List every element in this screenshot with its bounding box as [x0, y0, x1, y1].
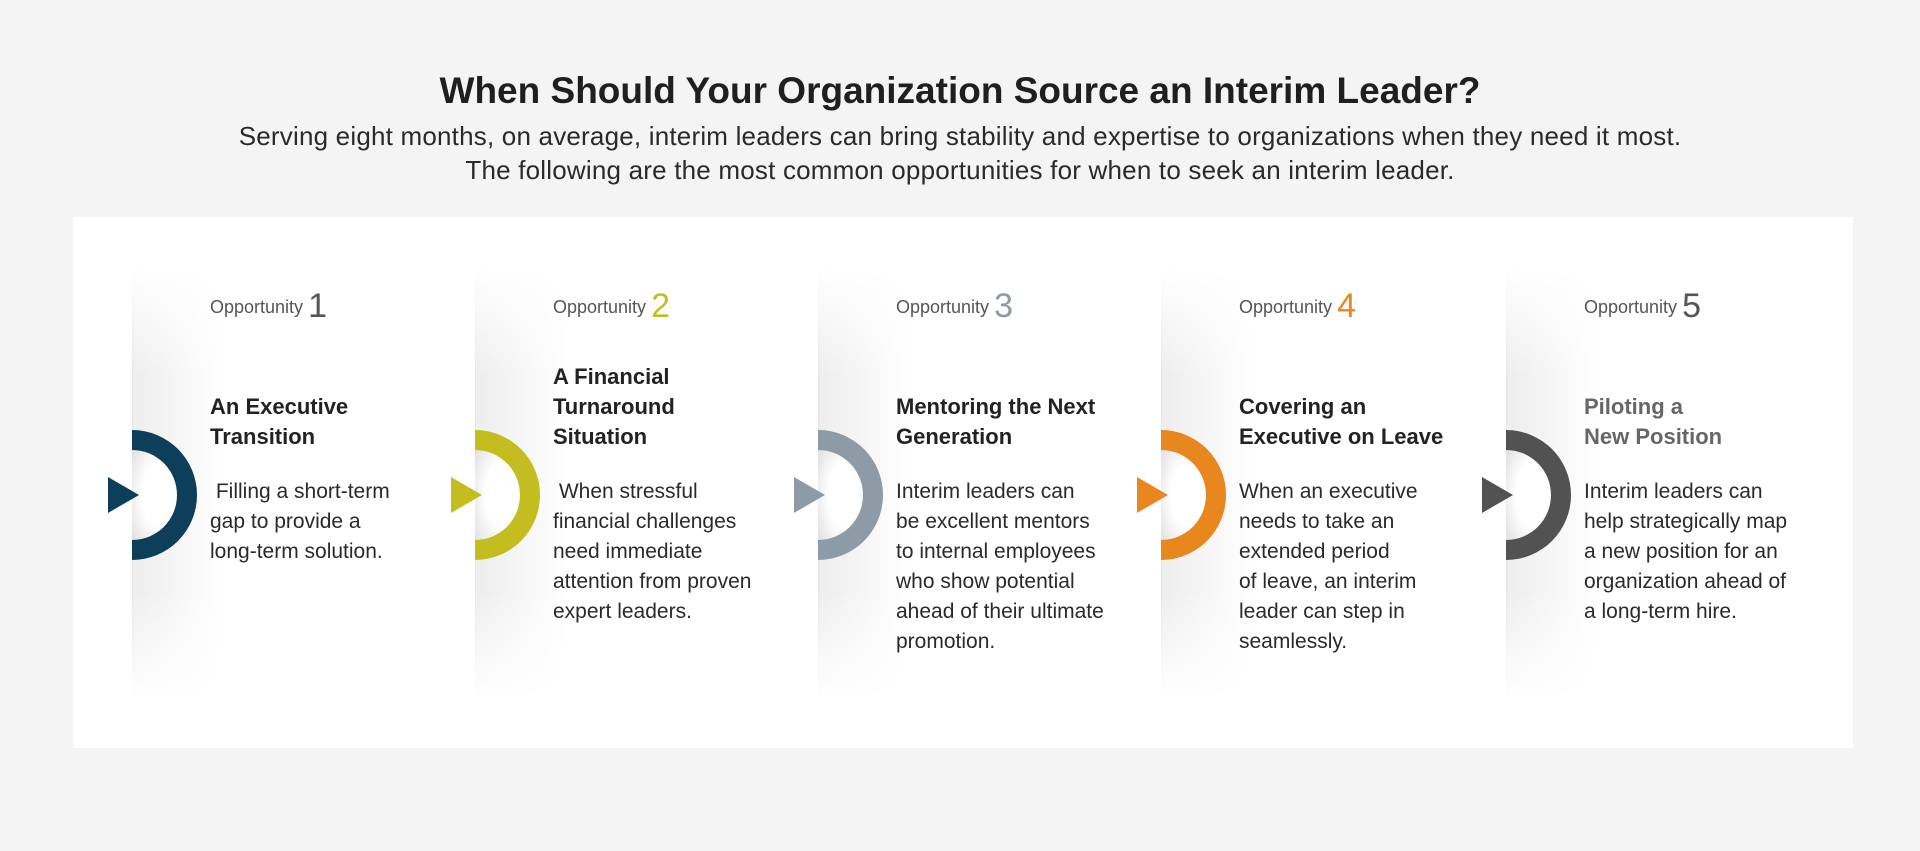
- card: opportunity 5: organization ahead of: [1584, 570, 1786, 593]
- card: opportunity 3: Mentoring the Next: [896, 394, 1095, 419]
- card: opportunity 1: Filling a short-term: [216, 480, 390, 503]
- card: opportunity 5: Opportunity5: [1584, 287, 1701, 325]
- card: opportunity 4: Executive on Leave: [1239, 424, 1443, 449]
- card: opportunity 3: be excellent mentors: [896, 510, 1090, 533]
- card: opportunity 2: Situation: [553, 424, 647, 449]
- card: opportunity 5: New Position: [1584, 424, 1722, 449]
- card: opportunity 4: needs to take an: [1239, 510, 1394, 533]
- card: opportunity 1: Transition: [210, 424, 315, 449]
- panel: opportunities: [73, 217, 1853, 748]
- card: opportunity 1: [108, 287, 390, 664]
- card: opportunity 1: gap to provide a: [210, 510, 361, 533]
- card: opportunity 3: Interim leaders can: [896, 480, 1075, 503]
- card: opportunity 3: [794, 287, 1104, 664]
- card: opportunity 3: to internal employees: [896, 540, 1096, 563]
- subtitle: The following are the most common opportunities for when to seek an interim leader.: [465, 155, 1455, 185]
- icon: ring arrow 1: [108, 430, 197, 560]
- icon: ring arrow 4: [1137, 430, 1226, 560]
- card: opportunity 3: who show potential: [896, 570, 1075, 593]
- card: opportunity 4: Covering an: [1239, 394, 1366, 419]
- card: opportunity 5: [1482, 287, 1787, 664]
- icon: ring arrow 2: [451, 430, 540, 560]
- title: When Should Your Organization Source an Interim Leader?: [440, 70, 1480, 111]
- card: opportunity 4: extended period: [1239, 540, 1390, 563]
- card: opportunity 2: need immediate: [553, 540, 702, 563]
- card: opportunity 5: Piloting a: [1584, 394, 1683, 419]
- card: opportunity 1: An Executive: [210, 394, 348, 419]
- card: opportunity 1: Opportunity1: [210, 287, 327, 325]
- card: opportunity 5: a new position for an: [1584, 540, 1778, 563]
- subtitle: [239, 121, 1681, 185]
- icon: ring arrow 3: [794, 430, 883, 560]
- card: opportunity 4: seamlessly.: [1239, 630, 1347, 653]
- card: opportunity 2: A Financial: [553, 364, 670, 389]
- card: opportunity 2: Turnaround: [553, 394, 675, 419]
- card: opportunity 3: Generation: [896, 424, 1012, 449]
- card: opportunity 2: [451, 287, 751, 664]
- card: opportunity 5: a long-term hire.: [1584, 600, 1737, 623]
- icon: ring arrow 5: [1482, 430, 1571, 560]
- card: opportunity 4: When an executive: [1239, 480, 1418, 503]
- card: opportunity 3: ahead of their ultimate: [896, 600, 1104, 623]
- subtitle: Serving eight months, on average, interim leaders can bring stability and expertise to organizations when they need it most.: [239, 121, 1681, 151]
- card: opportunity 1: long-term solution.: [210, 540, 383, 563]
- card: opportunity 4: of leave, an interim: [1239, 570, 1416, 593]
- card: opportunity 3: promotion.: [896, 630, 995, 653]
- card: opportunity 4: [1137, 287, 1443, 664]
- card: opportunity 5: Interim leaders can: [1584, 480, 1763, 503]
- card: opportunity 2: When stressful: [559, 480, 698, 503]
- card: opportunity 3: Opportunity3: [896, 287, 1013, 325]
- card: opportunity 2: expert leaders.: [553, 600, 692, 623]
- card: opportunity 5: help strategically map: [1584, 510, 1787, 533]
- card: opportunity 2: Opportunity2: [553, 287, 670, 325]
- card: opportunity 4: leader can step in: [1239, 600, 1405, 623]
- card: opportunity 4: Opportunity4: [1239, 287, 1356, 325]
- card: opportunity 2: attention from proven: [553, 570, 751, 593]
- card: opportunity 2: financial challenges: [553, 510, 736, 533]
